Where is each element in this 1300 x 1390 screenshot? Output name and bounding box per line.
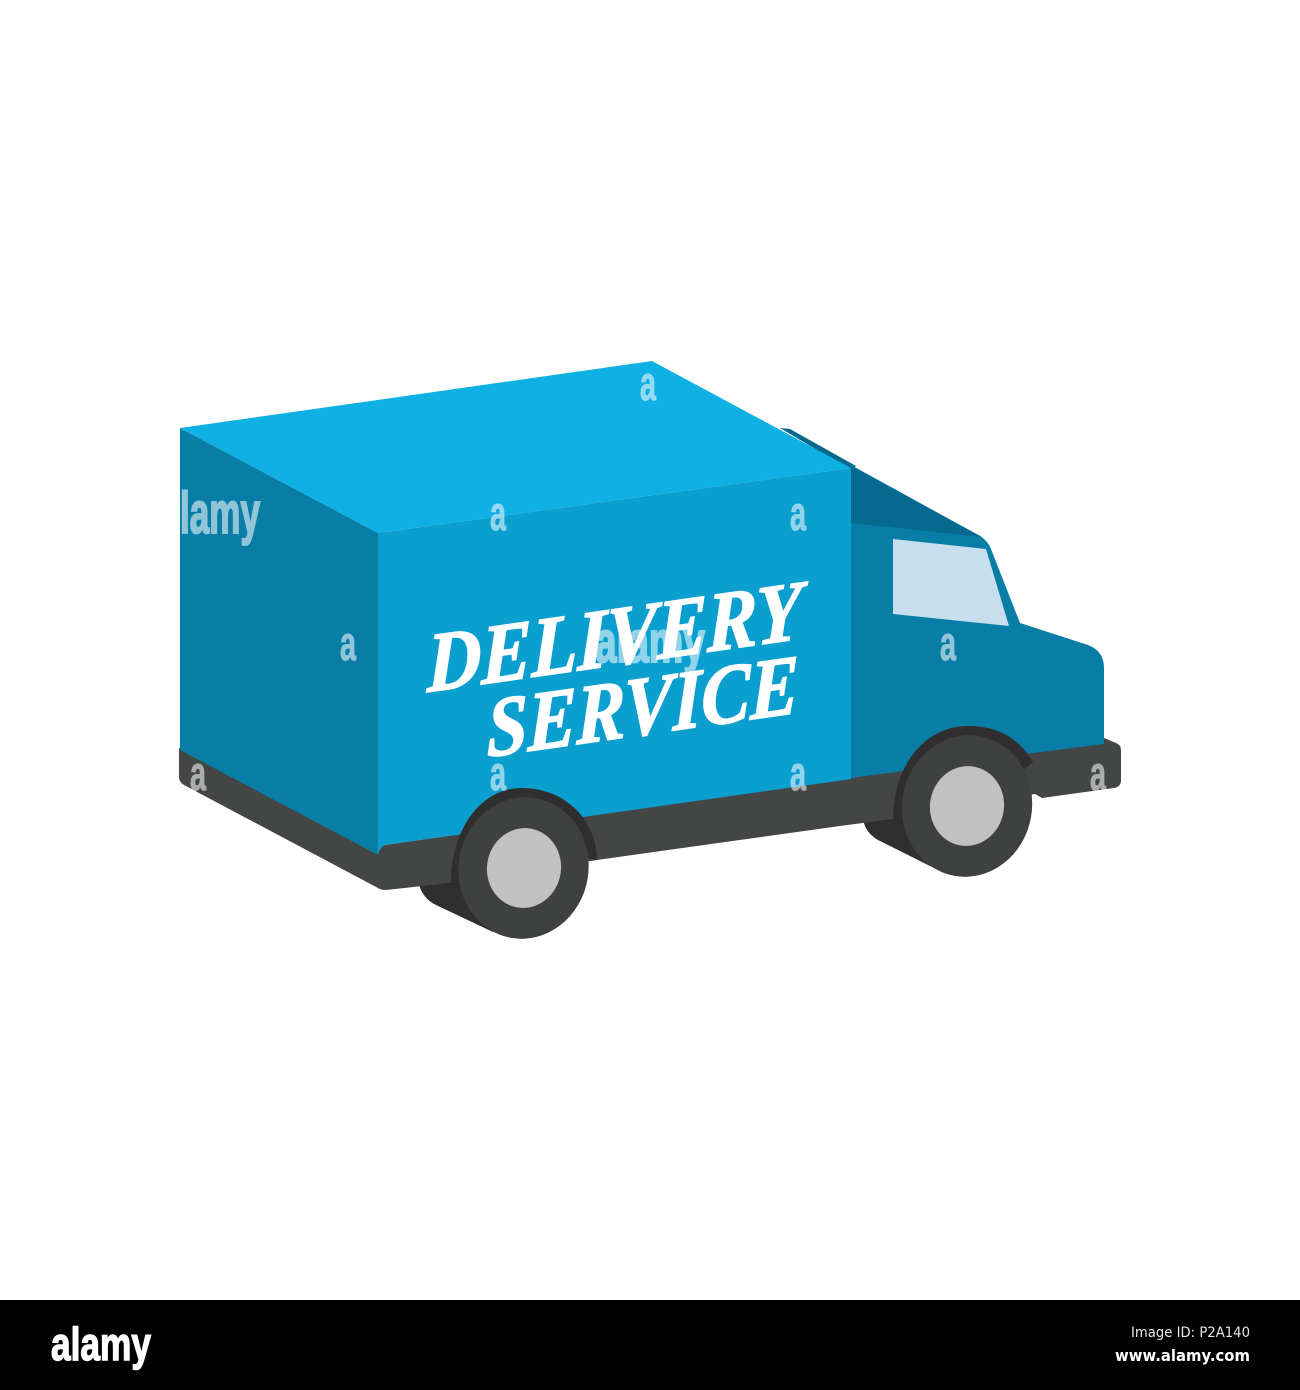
front wheel arch xyxy=(893,726,1033,830)
front wheel tread xyxy=(862,800,980,869)
truck cab xyxy=(851,465,1104,790)
rear hub xyxy=(481,822,567,914)
cab roof shadow xyxy=(851,466,982,537)
watermarks: a xyxy=(490,488,506,541)
watermarks: lamy xyxy=(180,481,260,546)
front hub xyxy=(924,760,1010,852)
front wheel xyxy=(891,725,1043,887)
watermarks: a xyxy=(790,748,806,801)
cab body xyxy=(851,465,1104,790)
image id: Image ID: P2A140 xyxy=(1131,1325,1250,1341)
front tyre xyxy=(891,725,1043,887)
watermarks: a xyxy=(1090,748,1106,801)
watermarks: a xyxy=(490,748,506,801)
SERVICE label: SERVICE xyxy=(487,637,799,776)
rear side chassis xyxy=(179,738,1121,890)
rear wheel xyxy=(447,787,600,949)
side lettering xyxy=(426,562,808,776)
DELIVERY label: DELIVERY xyxy=(426,562,808,711)
footer bar xyxy=(0,1300,1300,1390)
roof line behind box xyxy=(780,428,856,470)
watermarks xyxy=(180,358,1106,801)
chassis xyxy=(179,738,1121,890)
cab window xyxy=(893,539,1009,626)
website: www.alamy.com xyxy=(1115,1346,1250,1365)
watermarks: a xyxy=(940,618,956,671)
watermarks: a xyxy=(790,488,806,541)
watermarks: a xyxy=(640,358,656,411)
rear wheel tread xyxy=(418,860,530,932)
delivery truck xyxy=(179,361,1121,949)
watermarks: a xyxy=(190,748,206,801)
footer logo: alamy xyxy=(51,1318,151,1370)
box top face xyxy=(180,361,851,533)
watermarks: a xyxy=(340,618,356,671)
rear tyre xyxy=(447,787,600,949)
watermarks: alamy xyxy=(595,610,705,675)
box left face xyxy=(180,428,378,855)
box side face xyxy=(378,468,851,855)
rear wheel arch xyxy=(451,788,597,890)
